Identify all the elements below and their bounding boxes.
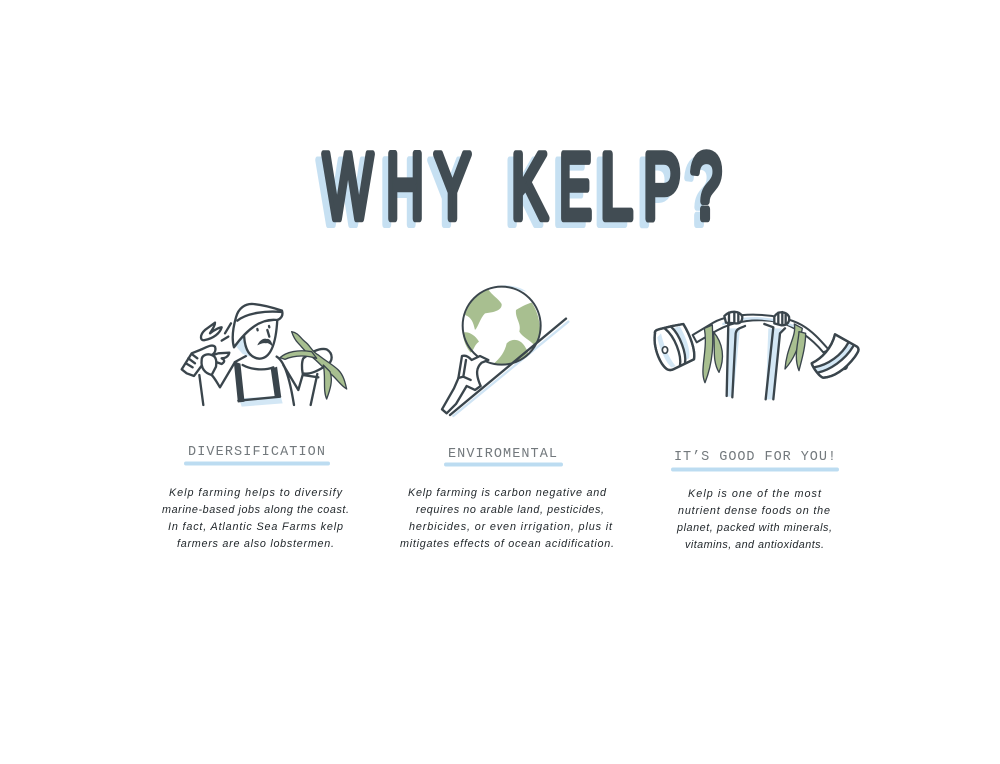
- title: Why Kelp?: ?: [690, 134, 722, 238]
- text block: it's good for you: Kelp is one of the most: [688, 488, 822, 500]
- text block: environmental: herbicides, or even irrigation, plus it: [409, 521, 613, 533]
- underline: environmental: [446, 462, 561, 466]
- text block: environmental: [400, 487, 614, 550]
- heading: diversification: DIVERSIFICATION: [188, 445, 325, 460]
- text block: environmental: requires no arable land, pesticides,: [416, 504, 604, 516]
- title: Why Kelp?: P: [637, 140, 675, 244]
- title: Why Kelp?: Y: [428, 140, 465, 244]
- text block: environmental: mitigates effects of ocean acidification.: [400, 538, 614, 550]
- panel: diversification: [162, 304, 349, 550]
- text block: diversification: marine-based jobs along the coast.: [162, 504, 349, 516]
- underline: it's good for you: [673, 468, 837, 472]
- title: Why Kelp?: [317, 134, 722, 244]
- title: Why Kelp?: W: [317, 140, 367, 244]
- title: Why Kelp?: K: [505, 140, 542, 244]
- text block: it's good for you: [676, 488, 832, 551]
- text block: it's good for you: vitamins, and antioxidants.: [685, 539, 824, 551]
- title: Why Kelp?: E: [553, 140, 586, 244]
- title: Why Kelp?: P: [643, 134, 681, 238]
- title: Why Kelp?: W: [323, 134, 373, 238]
- title: Why Kelp?: Y: [434, 134, 471, 238]
- title: Why Kelp?: L: [594, 140, 627, 244]
- icon: farmer holding lobster and kelp: [182, 304, 347, 407]
- title: Why Kelp?: ?: [684, 140, 716, 244]
- title: Why Kelp?: H: [380, 140, 418, 244]
- title: Why Kelp?: E: [559, 134, 592, 238]
- underline: diversification: [186, 462, 328, 466]
- icon: figure pushing globe uphill: [442, 285, 568, 416]
- text block: it's good for you: nutrient dense foods on the: [678, 505, 830, 517]
- text block: diversification: farmers are also lobstermen.: [177, 538, 334, 550]
- text block: diversification: In fact, Atlantic Sea Farms kelp: [168, 521, 343, 533]
- text block: it's good for you: planet, packed with minerals,: [676, 522, 832, 534]
- title: Why Kelp?: L: [600, 134, 633, 238]
- icon: arms lifting kelp barbell: [655, 312, 859, 399]
- panel: environmental: [400, 285, 614, 550]
- text block: environmental: Kelp farming is carbon negative and: [408, 487, 607, 499]
- title: Why Kelp?: H: [386, 134, 424, 238]
- panel: it's good for you: [655, 312, 859, 551]
- text block: diversification: [162, 487, 349, 550]
- text block: diversification: Kelp farming helps to diversify: [169, 487, 343, 499]
- title: Why Kelp?: K: [511, 134, 548, 238]
- heading: environmental: ENVIROMENTAL: [448, 447, 557, 462]
- heading: it's good for you: IT’S GOOD FOR YOU!: [674, 450, 836, 465]
